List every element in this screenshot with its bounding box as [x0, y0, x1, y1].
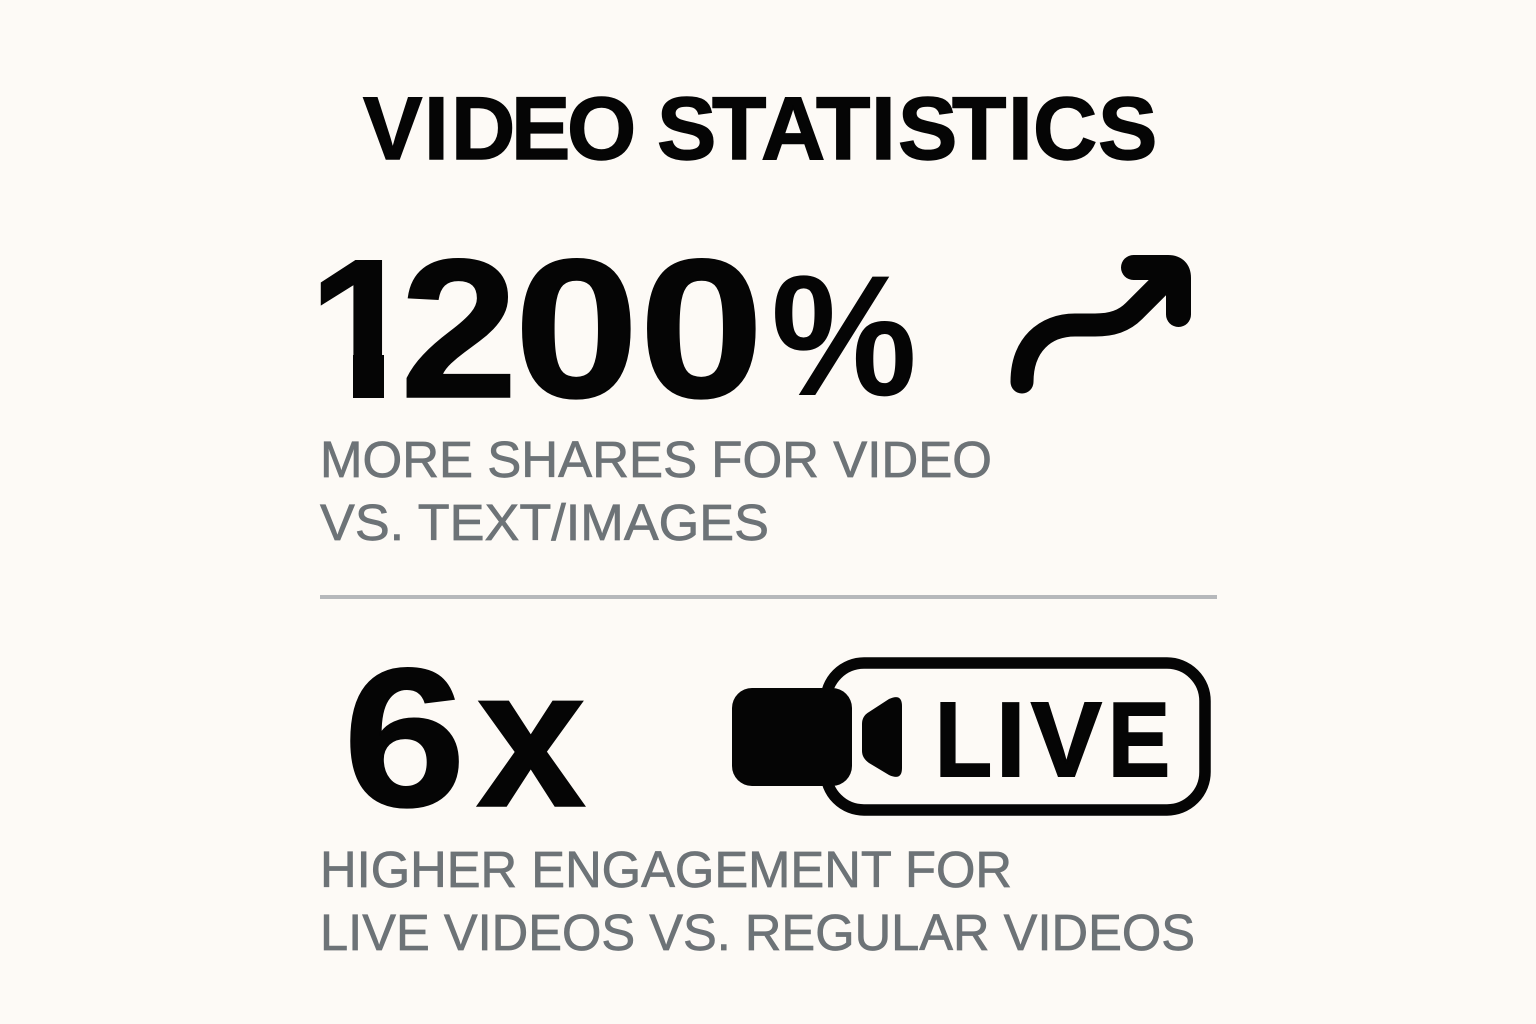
stat: 6x: 6 — [343, 627, 466, 848]
title: VIDEO STATISTICS — [363, 78, 1157, 178]
icon: rising arrow — [1022, 268, 1178, 382]
stat: 1200 percent — [305, 218, 917, 439]
description: higher engagement: HIGHER ENGAGEMENT FOR — [320, 841, 1012, 898]
stat: 1200 percent: 0 — [514, 218, 639, 439]
stat: 1200 percent: 2 — [400, 218, 518, 439]
description: higher engagement — [320, 841, 1195, 961]
description: more shares: VS. TEXT/IMAGES — [320, 494, 769, 551]
description: more shares — [320, 431, 992, 551]
description: higher engagement: LIVE VIDEOS VS. REGULAR VIDEOS — [320, 904, 1195, 961]
stat: 1200 percent: 1 — [308, 218, 418, 439]
stat: 1200 percent: 0 — [639, 218, 764, 439]
stat: 6x: x — [476, 627, 586, 848]
icon: live video camera: V — [1031, 681, 1102, 799]
stat: 6x — [343, 627, 586, 848]
icon: live video camera: I — [996, 681, 1025, 799]
icon: live video camera: L — [935, 681, 992, 799]
description: more shares: MORE SHARES FOR VIDEO — [320, 431, 992, 488]
icon: live video camera — [732, 663, 1205, 810]
stat: 1200 percent: % — [771, 240, 917, 432]
icon: live video camera: E — [1108, 681, 1170, 799]
